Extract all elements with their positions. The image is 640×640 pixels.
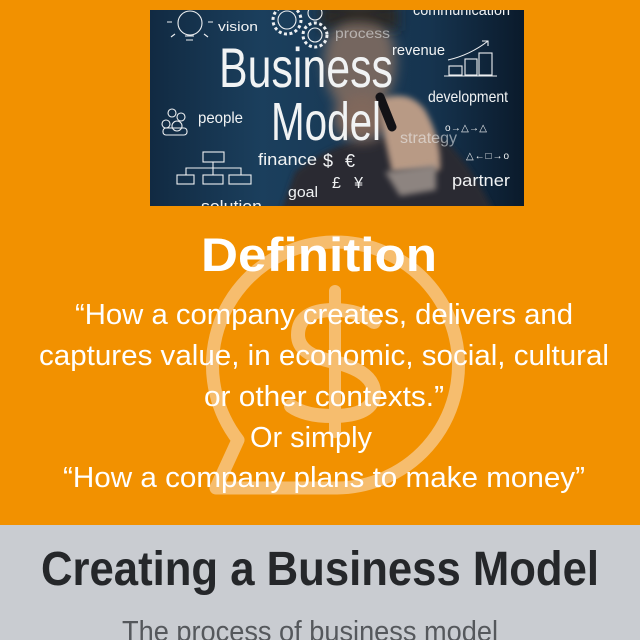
handwritten board text: people xyxy=(198,110,243,127)
handwritten board text: partner xyxy=(452,171,510,190)
handwritten board text: revenue xyxy=(392,42,445,59)
heading: creating a business model: Creating a Business Model xyxy=(41,543,599,596)
handwritten board text: £ ¥ xyxy=(332,175,363,192)
handwritten board text: process xyxy=(335,25,390,41)
wrist watch xyxy=(385,165,436,196)
handwritten board text: communication xyxy=(413,2,510,19)
handwritten board text: Business xyxy=(219,36,393,99)
handwritten board text xyxy=(198,2,510,216)
icon: dollar speech bubble watermark xyxy=(212,242,458,488)
heading: definition: Definition xyxy=(201,228,437,281)
photo: business model xyxy=(150,2,524,216)
handwritten board text: solution xyxy=(201,197,262,216)
definition text: captures value, in economic, social, cultural xyxy=(39,340,609,372)
definition text xyxy=(39,299,609,494)
definition text: “How a company creates, delivers and xyxy=(75,299,573,331)
handwritten board text: finance xyxy=(258,150,317,169)
definition text: Or simply xyxy=(250,422,373,454)
handwritten board text: development xyxy=(428,89,508,106)
man in suit xyxy=(280,5,495,215)
handwritten board text: $ € xyxy=(323,151,355,171)
handwritten board text: o→△→△ xyxy=(445,123,487,134)
definition text: “How a company plans to make money” xyxy=(63,462,585,494)
definition text: or other contexts.” xyxy=(204,381,444,413)
handwritten board text: goal xyxy=(288,184,318,201)
grey section background xyxy=(0,525,640,640)
handwritten board text: △←□→o xyxy=(466,151,509,162)
handwritten board text: Model xyxy=(271,92,381,152)
icons on board xyxy=(162,6,497,184)
handwritten board text: strategy xyxy=(400,130,457,147)
handwritten board text: vision xyxy=(218,19,258,34)
